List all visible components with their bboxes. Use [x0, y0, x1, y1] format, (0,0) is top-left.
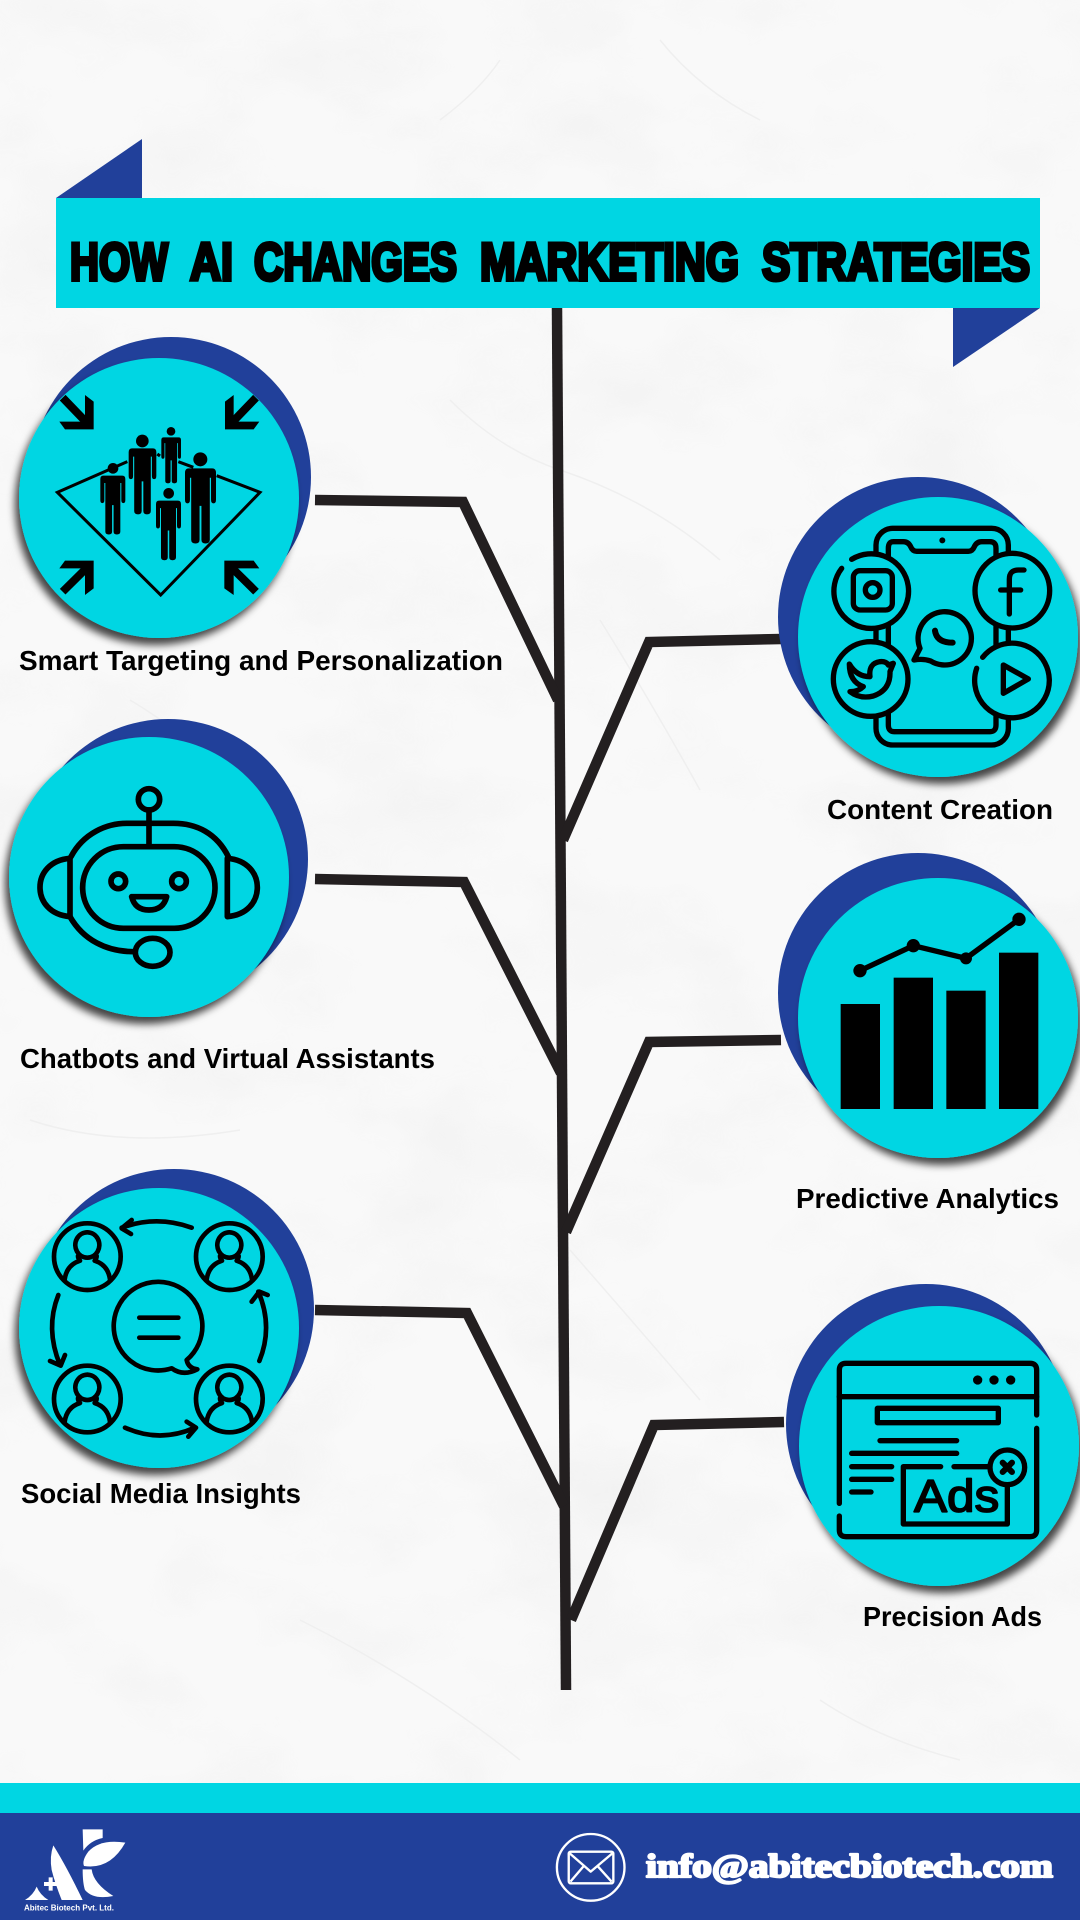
label: Precision Ads	[863, 1601, 1042, 1632]
panel: predictive analytics	[778, 853, 1078, 1214]
icon: envelope	[557, 1834, 624, 1901]
contact email: info@abitecbiotech.com	[646, 1849, 1053, 1885]
icon: users around chat bubble	[50, 1220, 268, 1437]
title: AI	[190, 233, 233, 292]
title: HOW	[70, 233, 168, 292]
label: Content Creation	[827, 794, 1053, 825]
panel: precision ads	[786, 1284, 1079, 1632]
label: Social Media Insights	[21, 1478, 301, 1509]
icon: crowd in assembly diamond	[57, 395, 260, 595]
label: Chatbots and Virtual Assistants	[20, 1043, 435, 1074]
panel: smart targeting	[19, 337, 503, 676]
title: CHANGES	[254, 233, 457, 292]
panel: chatbots	[9, 719, 435, 1074]
logo: Abitec Biotech Pvt. Ltd.	[24, 1903, 114, 1913]
label: Predictive Analytics	[796, 1183, 1059, 1214]
label: Smart Targeting and Personalization	[19, 645, 503, 676]
title: MARKETING	[480, 233, 739, 292]
panel: social media insights	[19, 1169, 314, 1509]
footer	[0, 1783, 1080, 1920]
logo	[24, 1829, 125, 1913]
icon: browser window with ad: Ads	[914, 1471, 999, 1522]
icon: browser window with ad	[839, 1363, 1037, 1537]
icon: bar chart with trend line	[841, 913, 1038, 1109]
trunk and branches connector	[315, 308, 784, 1690]
icon: robot with headset	[40, 789, 257, 966]
icon: phone with social networks	[833, 528, 1050, 745]
panel: content creation	[778, 477, 1078, 825]
title banner	[56, 139, 1040, 367]
